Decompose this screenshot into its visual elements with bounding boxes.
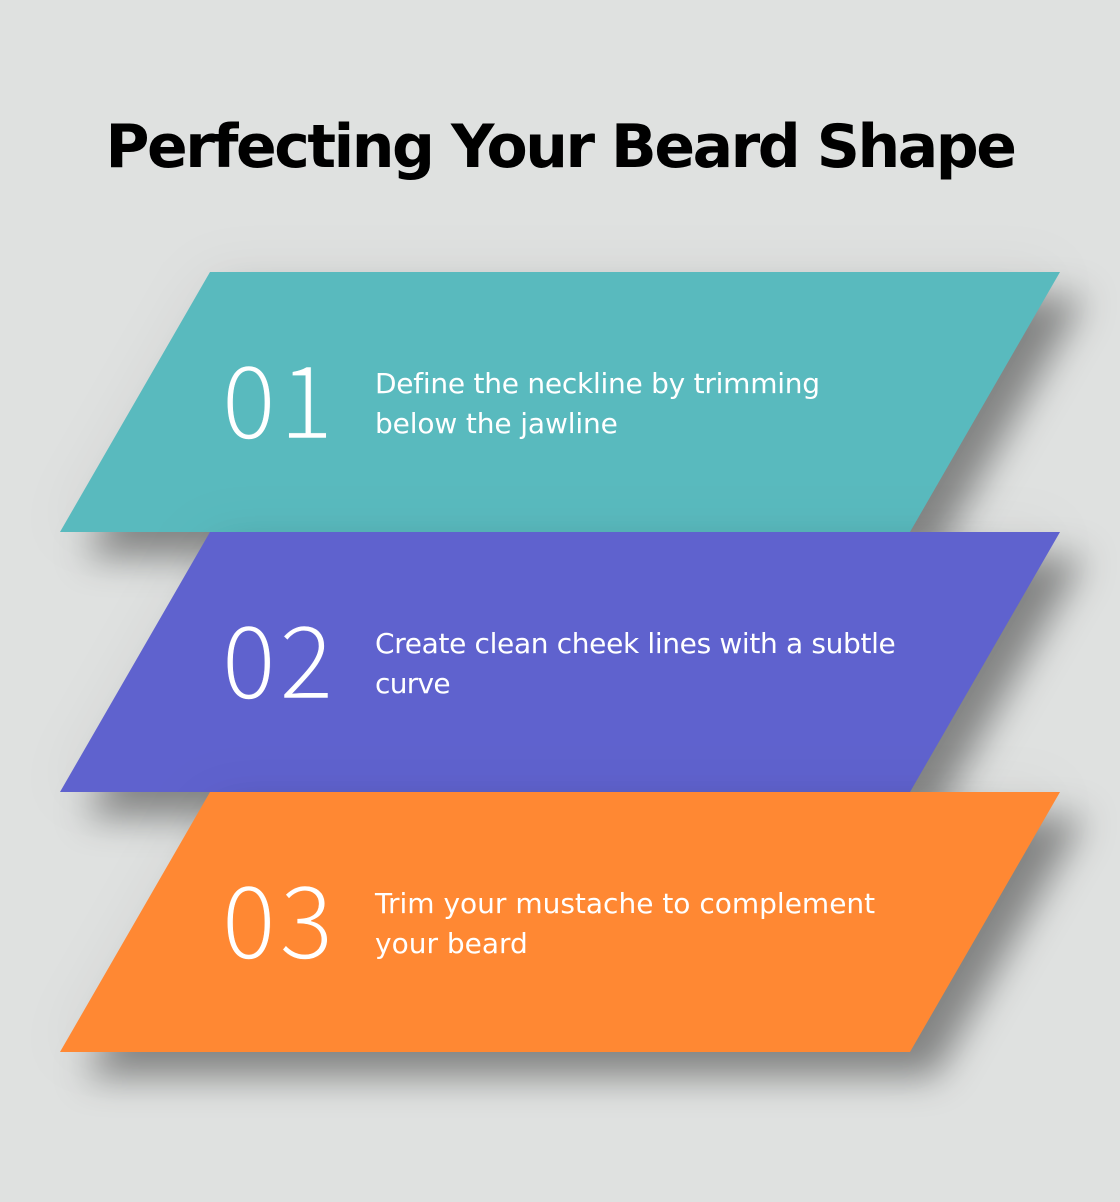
step 2 number: 02 bbox=[222, 582, 337, 727]
step 3 text: Trim your mustache to complement bbox=[375, 887, 875, 920]
title: Perfecting Your Beard Shape bbox=[105, 112, 1015, 182]
step 2 text: Create clean cheek lines with a subtle bbox=[375, 627, 895, 660]
step 3 text: your beard bbox=[375, 927, 528, 960]
step 3 text bbox=[374, 887, 875, 960]
panel 2 with shadow bbox=[60, 532, 1085, 817]
step 2 text bbox=[375, 627, 895, 700]
step 1 text bbox=[375, 367, 820, 440]
step 3 number: 03 bbox=[222, 842, 337, 987]
step 1 text: Define the neckline by trimming bbox=[375, 367, 820, 400]
panel 3 with shadow bbox=[60, 792, 1085, 1077]
panel 1 with shadow bbox=[60, 272, 1085, 557]
step 1 text: below the jawline bbox=[375, 407, 618, 440]
step 2 text: curve bbox=[375, 667, 450, 700]
step 1 number: 01 bbox=[222, 322, 337, 467]
